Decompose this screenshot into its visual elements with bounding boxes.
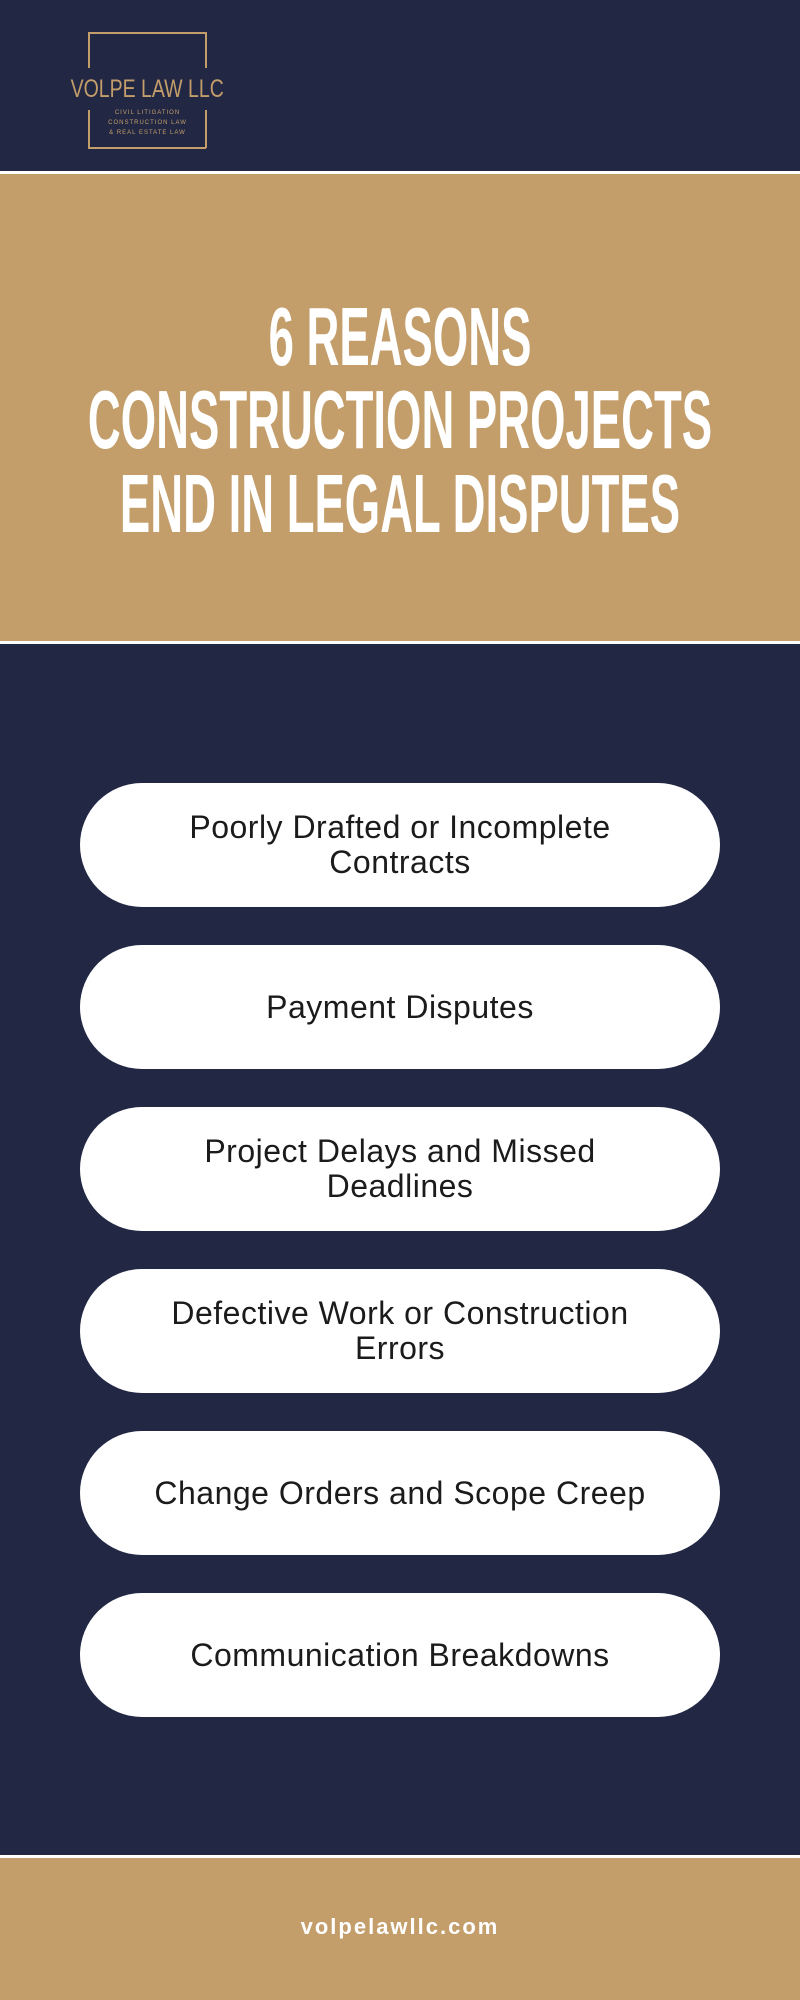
title: END IN LEGAL DISPUTES	[120, 457, 680, 550]
reason 5	[80, 1431, 720, 1555]
reason 4	[80, 1269, 720, 1393]
logo	[70, 32, 224, 149]
reason 3: Project Delays and Missed Deadlines	[204, 1133, 596, 1204]
logo: & REAL ESTATE LAW	[109, 130, 186, 136]
title: 6 REASONS	[269, 290, 531, 383]
logo: CIVIL LITIGATION	[115, 110, 180, 116]
reason 6: Communication Breakdowns	[190, 1636, 610, 1672]
footer	[0, 1858, 800, 2000]
reason 3	[80, 1107, 720, 1231]
header band	[0, 0, 800, 171]
reason 1	[80, 783, 720, 907]
reason 1: Poorly Drafted or Incomplete Contracts	[189, 809, 611, 880]
title: CONSTRUCTION PROJECTS	[88, 373, 712, 466]
reason 4: Defective Work or Construction Errors	[171, 1295, 629, 1366]
reason 5: Change Orders and Scope Creep	[154, 1474, 646, 1510]
logo: CONSTRUCTION LAW	[108, 120, 187, 126]
reason 6	[80, 1593, 720, 1717]
footer url: volpelawllc.com	[301, 1914, 499, 1939]
reason 2	[80, 945, 720, 1069]
title panel	[0, 174, 800, 641]
panel: reasons list	[80, 783, 720, 1717]
logo: VOLPE LAW LLC	[71, 75, 224, 103]
title	[88, 290, 712, 550]
reason 2: Payment Disputes	[266, 988, 534, 1024]
